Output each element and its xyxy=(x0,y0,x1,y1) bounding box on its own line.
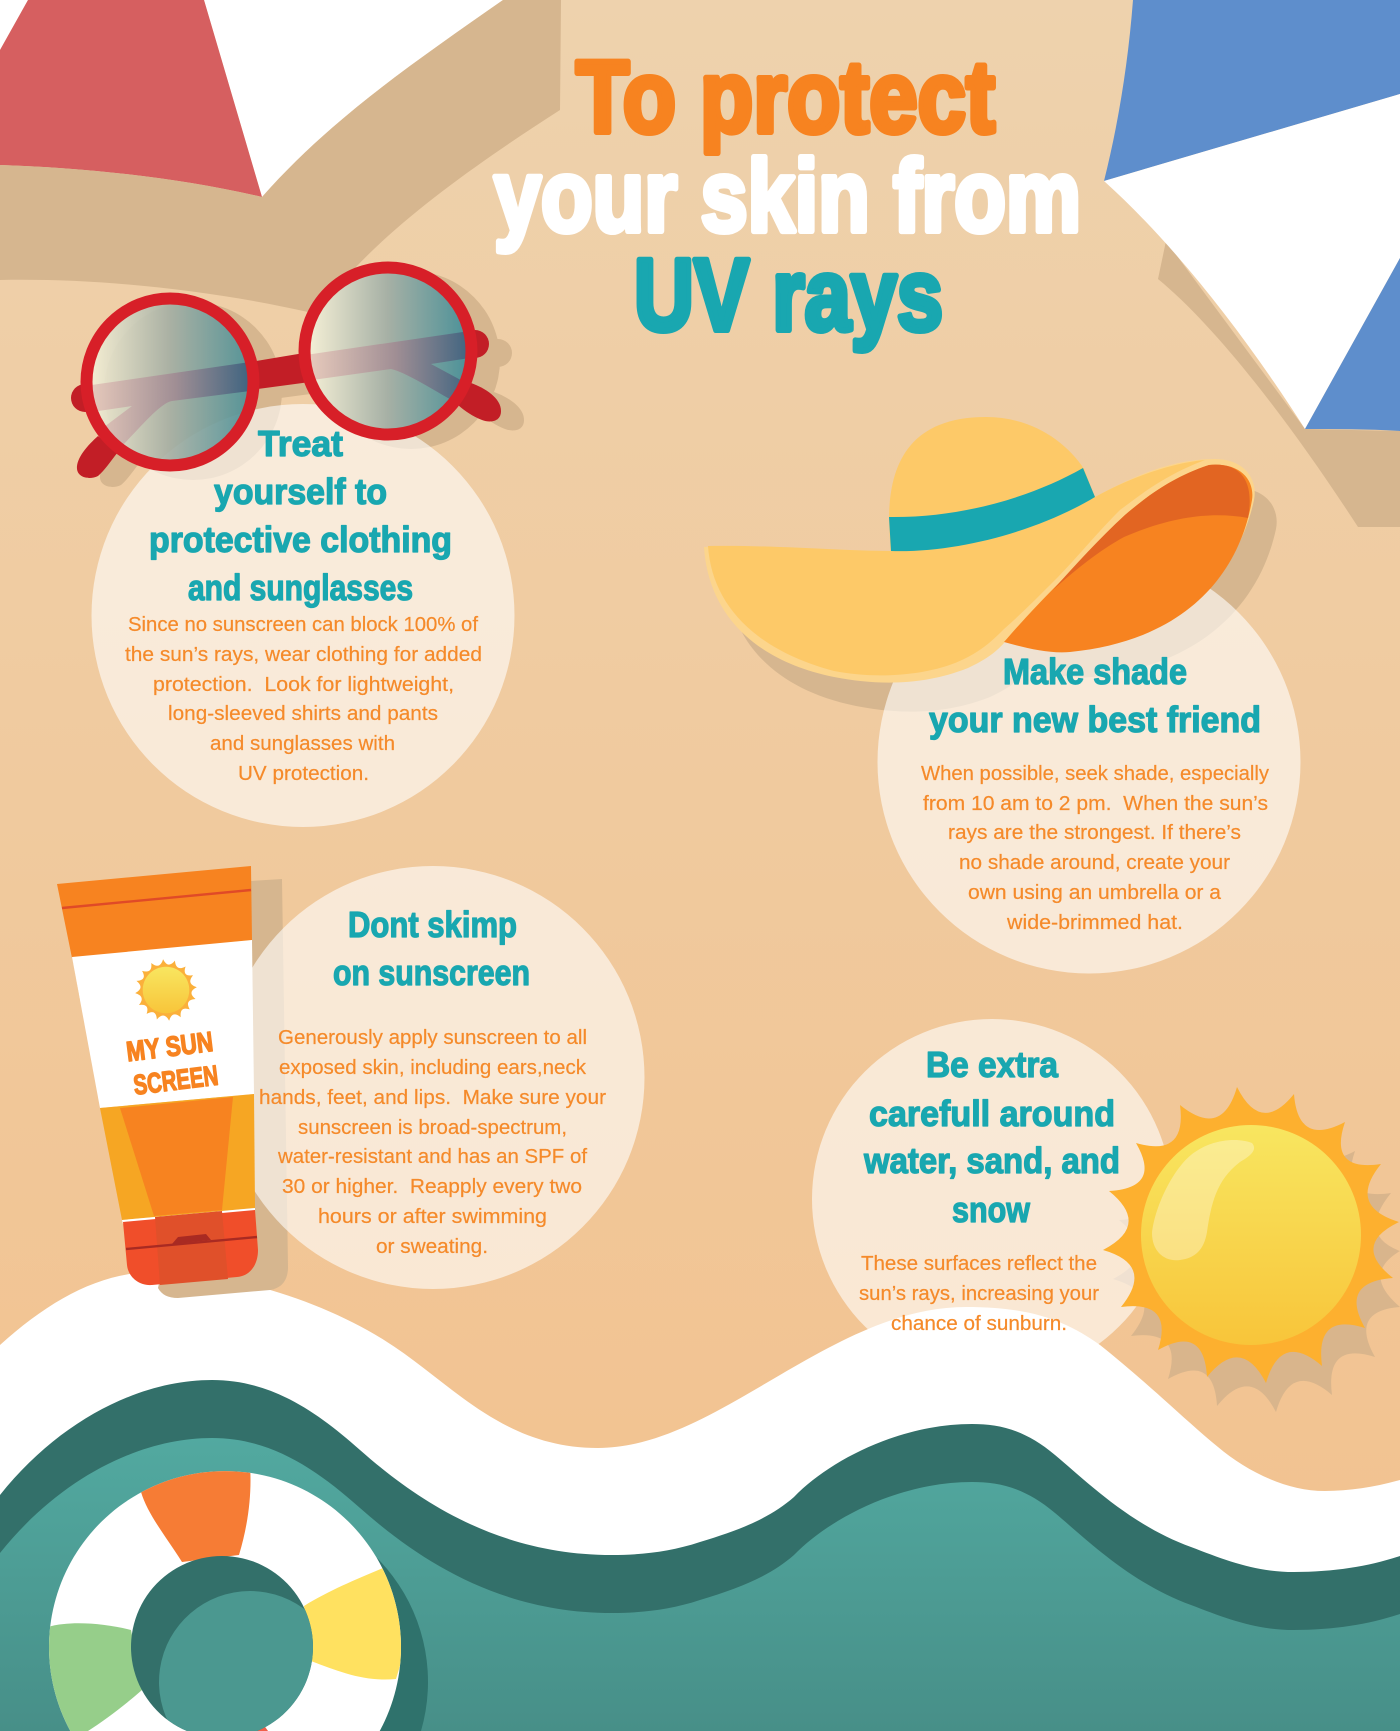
body text: sunscreen: water-resistant and has an SPF of xyxy=(277,1146,587,1168)
body text: extra careful xyxy=(859,1253,1099,1335)
umbrella top-right: lower blue panel xyxy=(1305,258,1400,431)
body text: shade: wide-brimmed hat. xyxy=(1006,912,1183,934)
right lens xyxy=(305,271,470,431)
tube label text: SCREEN xyxy=(132,1060,220,1101)
heading: protective clothing xyxy=(149,423,452,608)
body text: sunscreen: exposed skin, including ears,neck xyxy=(279,1057,587,1079)
icon: sunscreen tube shadow xyxy=(158,879,288,1298)
umbrella top-right: shadow xyxy=(1158,241,1400,527)
tube sun logo xyxy=(135,959,197,1021)
heading: sunscreen: Dont skimp xyxy=(348,904,517,945)
heading: sunscreen xyxy=(333,904,530,993)
body text: protective clothing: the sun’s rays, wear clothing for added xyxy=(125,644,482,666)
heading: extra careful: water, sand, and xyxy=(863,1140,1120,1181)
body text: sunscreen: sunscreen is broad-spectrum, xyxy=(298,1117,567,1139)
heading: extra careful: snow xyxy=(952,1189,1031,1230)
body text: sunscreen: hours or after swimming xyxy=(318,1206,547,1228)
body text: extra careful: These surfaces reflect the xyxy=(861,1253,1097,1275)
panel circle: shade xyxy=(878,550,1300,974)
dark teal wave xyxy=(0,1380,1400,1731)
white surf wave xyxy=(0,1272,1400,1731)
heading: shade: your new best friend xyxy=(929,699,1261,740)
ring stripes xyxy=(40,1465,420,1731)
body text: sunscreen: 30 or higher. Reapply every two xyxy=(282,1176,582,1198)
umbrella top-right: white panel xyxy=(1104,94,1400,429)
umbrella top-left: white panel xyxy=(0,0,503,197)
heading: protective clothing: protective clothing xyxy=(149,519,452,560)
heading: protective clothing: yourself to xyxy=(214,471,387,512)
sea water xyxy=(0,1438,1400,1731)
tube label text: MY SUN xyxy=(125,1026,215,1067)
body text: sunscreen: Generously apply sunscreen to all xyxy=(278,1027,587,1049)
icon: swim ring xyxy=(40,1465,428,1731)
panel circle: sunscreen xyxy=(222,866,644,1289)
icon: sun xyxy=(1103,1087,1399,1383)
icon: sun shadow xyxy=(1113,1116,1400,1412)
icon: sun hat xyxy=(704,417,1255,683)
body text: protective clothing: protection. Look for lightweight, xyxy=(153,674,454,696)
body text: shade xyxy=(921,763,1269,934)
tube label text xyxy=(125,1026,220,1101)
body text: protective clothing: long-sleeved shirts and pants xyxy=(168,703,438,725)
heading: extra careful: Be extra xyxy=(926,1044,1059,1085)
heading: shade xyxy=(929,651,1261,740)
body text: sunscreen: hands, feet, and lips. Make sure your xyxy=(259,1087,606,1109)
body text: shade: rays are the strongest. If there’s xyxy=(948,822,1241,844)
umbrella top-right: blue panel xyxy=(1104,0,1400,181)
body text: shade: When possible, seek shade, especially xyxy=(921,763,1269,785)
heading: protective clothing: Treat xyxy=(258,423,343,464)
heading: extra careful xyxy=(863,1044,1120,1230)
icon: sunscreen tube xyxy=(57,866,258,1285)
body text: protective clothing xyxy=(125,614,482,785)
body text: sunscreen xyxy=(259,1027,606,1258)
left lens xyxy=(85,302,250,462)
body text: shade: no shade around, create your xyxy=(959,852,1230,874)
heading: extra careful: carefull around xyxy=(869,1093,1115,1134)
title xyxy=(494,40,1081,352)
icon: hat shadow xyxy=(726,488,1277,712)
body text: protective clothing: Since no sunscreen can block 100% of xyxy=(128,614,478,636)
body text: extra careful: chance of sunburn. xyxy=(891,1313,1067,1335)
title: To protect xyxy=(576,40,995,154)
body text: extra careful: sun’s rays, increasing your xyxy=(859,1283,1099,1305)
panel circle: protective clothing xyxy=(92,404,514,827)
icon: sunglasses shadow xyxy=(100,271,524,487)
heading: shade: Make shade xyxy=(1003,651,1187,692)
body text: shade: own using an umbrella or a xyxy=(968,882,1222,904)
heading: sunscreen: on sunscreen xyxy=(333,952,530,993)
body text: sunscreen: or sweating. xyxy=(376,1236,488,1258)
icon: sunglasses frame xyxy=(71,268,501,478)
umbrella top-left: red panel xyxy=(0,0,262,197)
title: your skin from xyxy=(494,139,1081,253)
umbrella top-left: shadow xyxy=(0,0,561,312)
body text: protective clothing: UV protection. xyxy=(238,763,369,785)
title: UV rays xyxy=(634,238,943,352)
heading: protective clothing: and sunglasses xyxy=(188,567,413,608)
body text: shade: from 10 am to 2 pm. When the sun’s xyxy=(923,793,1268,815)
body text: protective clothing: and sunglasses with xyxy=(210,733,395,755)
panel circle: extra careful xyxy=(812,1019,1172,1379)
